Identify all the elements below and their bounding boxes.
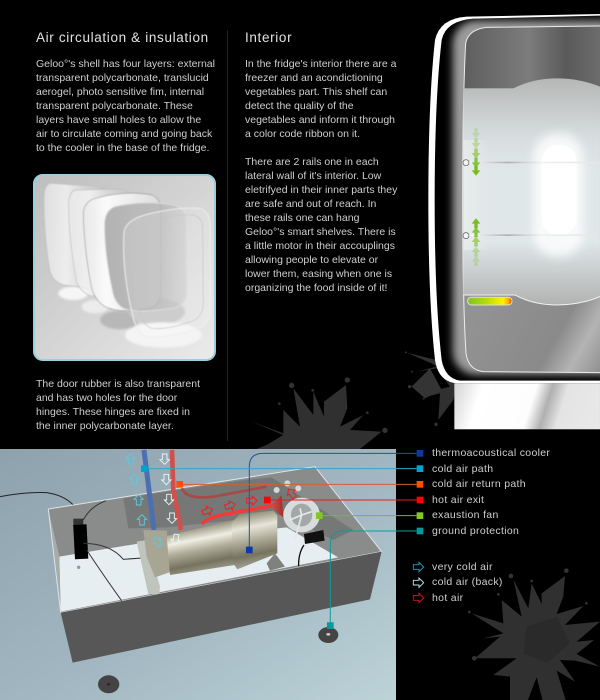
text: interior description: vegetables and inform it through (245, 114, 395, 126)
text: interior description (245, 58, 396, 140)
divider between text columns (227, 30, 228, 441)
door bottom section (463, 295, 600, 373)
text: rails description: eletrifyed in their inner parts they (245, 184, 397, 196)
legend label: cold air return path: cold air return path (432, 478, 526, 490)
shell layer 3 (83, 193, 161, 311)
decorative star: bottom right (468, 568, 600, 700)
text: door rubber (36, 378, 200, 432)
floor shadows (58, 287, 202, 348)
fridge base (454, 383, 600, 429)
box front face (61, 552, 382, 663)
legend label: very cold air: very cold air (432, 561, 493, 573)
hot air arrows (201, 486, 298, 517)
fridge dark body (435, 16, 600, 381)
text: shell layers: Geloo°'s shell has four layers: external (36, 58, 215, 70)
interior lower edge (463, 295, 600, 305)
text: rails description: organizing the food inside of it! (245, 282, 387, 294)
text: interior description: In the fridge's interior there are a (245, 58, 396, 70)
callout: cold air path (141, 465, 423, 472)
interior light panel (463, 78, 600, 305)
text: rails description: lower them, easing when one is (245, 268, 392, 280)
text: shell layers: aerogel, photo sensitive fim, internal (36, 86, 204, 98)
legend label: exaustion fan: exaustion fan (432, 509, 499, 521)
thermoacoustic cooler mount (137, 540, 160, 594)
text: rails description: allowing people to elevate or (245, 254, 378, 266)
text: rails description: There are 2 rails one in each (245, 156, 379, 168)
cooler cylinder body (167, 520, 235, 575)
shelf clip lower (463, 233, 469, 239)
text: door rubber: the inner polycarbonate layer. (36, 420, 174, 432)
text: shell layers: transparent polycarbonate. These (36, 100, 193, 112)
text: shell layers (36, 58, 215, 154)
fridge white outer shell (428, 14, 600, 383)
text: rails description: these rails one can hang (245, 212, 359, 224)
colour code ribbon (468, 297, 512, 305)
legend label: ground protection: ground protection (432, 525, 519, 537)
box left wall (48, 509, 61, 613)
text: door rubber: The door rubber is also transparent (36, 378, 200, 390)
fridge body soft shading (453, 21, 600, 375)
heading: interior: Interior (245, 30, 292, 45)
green arrows moving shelf down (472, 128, 480, 176)
box internal parts (123, 477, 353, 540)
layered shells (44, 183, 211, 337)
cold air back arrows (160, 454, 181, 545)
ground protection pad left (98, 675, 119, 693)
ground protection pad right (318, 627, 338, 643)
illustration: fridge front view (428, 14, 600, 429)
cooler cylinder wide section (232, 511, 277, 569)
green arrows moving shelf up (472, 218, 480, 266)
cold air path tube (144, 450, 154, 530)
cooler right mount (267, 553, 285, 571)
text: door rubber: and has two holes for the door (36, 392, 177, 404)
box back walls (48, 467, 382, 613)
legend arrow: hot air (413, 593, 424, 603)
shell layer 4 (105, 203, 187, 311)
shelf rail lower (468, 234, 600, 236)
text: interior description: vegetables part. This shelf can (245, 86, 387, 98)
callout: hot air exit (264, 497, 423, 503)
panel: shell layers image (34, 175, 215, 360)
legend arrow: cold air back (413, 578, 424, 587)
hot air exit tube (202, 505, 277, 524)
power cable (0, 492, 73, 505)
callout: cold air return path (176, 481, 423, 488)
shell layer 1 (44, 183, 108, 288)
legend label: thermoacoustical cooler: thermoacoustical cooler (432, 447, 550, 459)
callout lines and markers (141, 450, 423, 629)
legend arrows (413, 562, 424, 603)
callout: thermoacoustical cooler (246, 450, 423, 553)
text: shell layers: to the cooler in the base of the fridge. (36, 142, 209, 154)
text: rails description: lateral wall of it's interior. Low (245, 170, 381, 182)
legend label: cold air path: cold air path (432, 463, 493, 475)
red cone (272, 495, 283, 517)
shelf rail upper (468, 162, 600, 163)
text: interior description: a color code ribbon on it. (245, 128, 360, 140)
box floor (59, 527, 338, 612)
heading: air circulation: Air circulation & insulation (36, 30, 209, 45)
legend label: cold air back: cold air (back) (432, 576, 503, 588)
text: rails description (245, 156, 398, 294)
text: shell layers: layers have small holes to allow the (36, 114, 201, 126)
exhaustion fan (274, 480, 320, 539)
shelf clip upper (463, 160, 469, 166)
legend label: hot air exit: hot air exit (432, 494, 484, 506)
callout: exaustion fan (316, 512, 423, 519)
interior lamp (542, 145, 577, 235)
legend arrow: very cold air (413, 562, 424, 572)
text: shell layers: air to circulate coming and going back (36, 128, 212, 140)
box rim (48, 467, 382, 613)
cold air return red tube shadow (182, 487, 267, 497)
shell layer 2 (69, 189, 132, 298)
very cold air arrows (126, 454, 164, 548)
door top section (463, 26, 600, 88)
text: rails description: are safe and out of reach. In (245, 198, 376, 210)
decorative star: middle (250, 377, 388, 452)
text: rails description: Geloo°'s smart shelves. There is (245, 226, 396, 238)
interior lamp glow (533, 133, 583, 257)
door outline (463, 26, 600, 373)
black motor (299, 530, 325, 566)
interior left highlight (463, 140, 597, 250)
shell layer 5 ring (124, 208, 211, 337)
callout: ground protection (327, 528, 423, 629)
text: door rubber: hinges. These hinges are fixed in (36, 406, 190, 418)
decorative star: behind fridge (405, 351, 457, 426)
text: rails description: a little motor in their accouplings (245, 240, 395, 252)
cooler left collar (143, 530, 172, 577)
text: shell layers: transparent polycarbonate, translucid (36, 72, 209, 84)
box left cables and plug (73, 501, 152, 601)
text: interior description: detect the quality of the (245, 100, 354, 112)
legend label: hot air: hot air (432, 592, 463, 604)
panel: cooler cutaway illustration (0, 449, 396, 700)
cold air return tube (172, 450, 181, 530)
text: interior description: freezer and an acondictioning (245, 72, 383, 84)
